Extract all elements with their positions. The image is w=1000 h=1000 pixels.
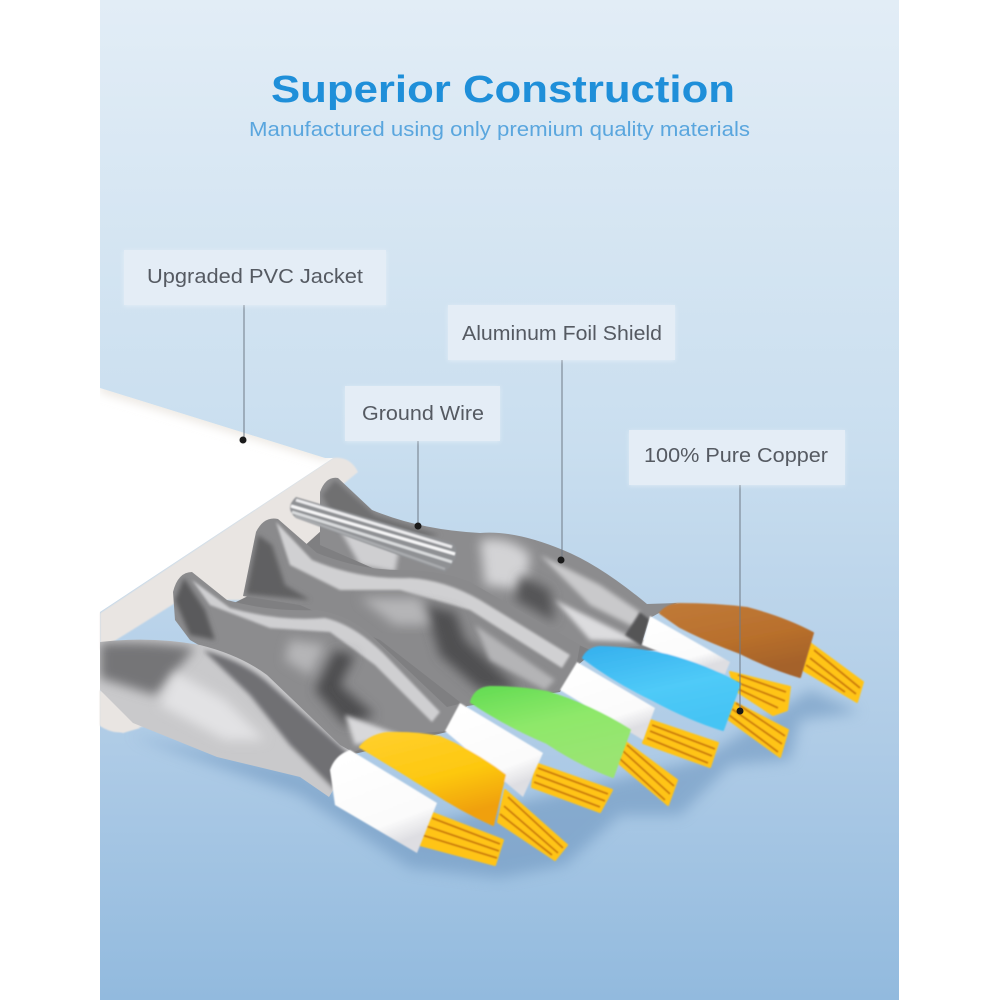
blue insulation <box>583 647 740 730</box>
white sheath 4 <box>330 750 437 853</box>
insulated wires <box>330 604 813 853</box>
callout: Ground Wire: Ground Wire <box>362 403 484 425</box>
white pair 1 conductor <box>730 672 790 715</box>
callout: 100% Pure Copper <box>629 430 845 714</box>
callout: Upgraded PVC Jacket <box>124 250 386 444</box>
callout: Ground Wire <box>345 386 500 530</box>
title: Superior Construction <box>271 69 735 111</box>
callout: Upgraded PVC Jacket: Upgraded PVC Jacket <box>147 266 363 288</box>
white sheath 3 <box>445 703 543 797</box>
foil pair 2 <box>243 519 580 706</box>
white pair 4 conductor <box>420 813 503 865</box>
blue pair conductor <box>725 700 788 757</box>
infographic scene <box>100 0 899 1000</box>
yellow pair conductor <box>498 790 567 860</box>
white sheath 2 <box>560 662 655 740</box>
callout: Aluminum Foil Shield: Aluminum Foil Shield <box>462 323 662 345</box>
brown pair conductor <box>803 643 863 702</box>
foil pair 4 <box>100 640 358 797</box>
ground wire <box>290 497 457 572</box>
white pair 3 conductor <box>532 763 612 812</box>
background panel <box>100 0 899 1000</box>
green insulation <box>471 687 630 777</box>
green pair conductor <box>615 740 677 805</box>
yellow insulation <box>360 733 505 825</box>
copper conductors <box>420 643 863 865</box>
brown insulation <box>660 604 813 677</box>
PVC jacket <box>100 386 358 733</box>
callout: Aluminum Foil Shield <box>448 305 675 564</box>
cable illustration <box>100 386 863 878</box>
white pair 2 conductor <box>643 720 718 767</box>
subtitle: Manufactured using only premium quality materials <box>249 119 750 141</box>
foil pair 3 <box>173 572 467 755</box>
callout: 100% Pure Copper: 100% Pure Copper <box>644 445 828 467</box>
foil pair 1 <box>320 478 677 650</box>
foil backing <box>200 530 660 755</box>
white sheath 1 <box>642 616 730 674</box>
wire shadows <box>130 690 860 878</box>
